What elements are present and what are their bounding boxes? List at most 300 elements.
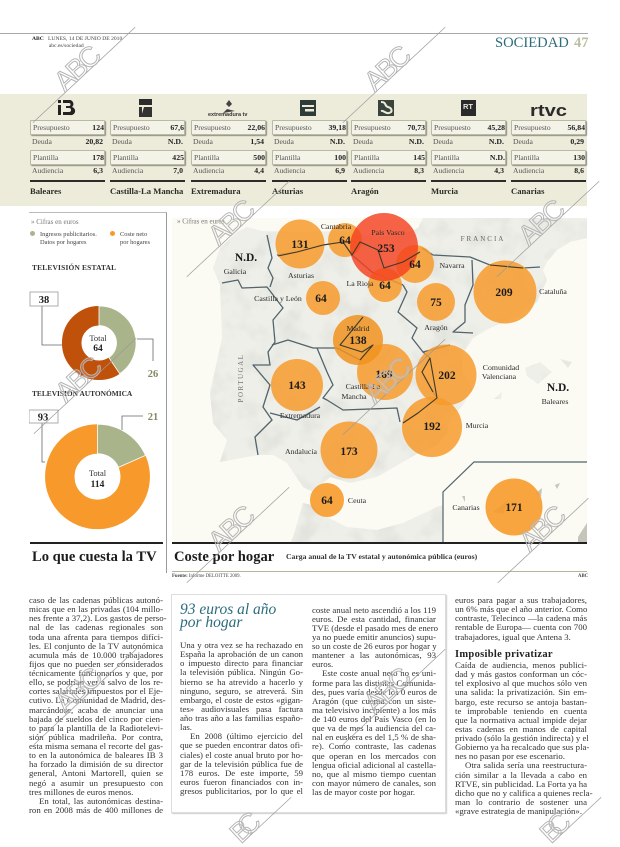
watermarks: ABC: ABC	[512, 193, 571, 251]
row: Plantilla	[30, 150, 105, 165]
sidebar text column 1: tes» audiovisuales pasa factura	[180, 704, 303, 714]
sidebar text column 1: las.	[180, 722, 192, 732]
text column 1: to para la plantilla de la Radiotelevi-	[29, 723, 163, 733]
sidebar text column 2: las de mayor coste por hogar.	[312, 787, 415, 797]
text column 4 top: rentable de Europa— cuenta con 700	[455, 622, 587, 632]
donut chart: state television: 38	[39, 295, 49, 306]
row: Deuda: 0,29	[570, 137, 584, 146]
text column 4 bottom: que la normativa actual impide dejar	[455, 715, 587, 725]
row: Audiencia	[274, 166, 345, 175]
text column 1: cortes salariales impuestos por el Eje-	[29, 686, 163, 696]
sidebar text column 1: En 2008 (último ejercicio del	[190, 731, 303, 741]
source note: Fuente: Informe DELOITTE 2009.	[172, 574, 241, 579]
map values and labels: 253	[377, 243, 395, 255]
row: Deuda: N.D.	[330, 137, 345, 146]
logo: Aragón TV	[378, 100, 394, 116]
row: Plantilla: Plantilla	[354, 153, 379, 162]
row: Deuda	[112, 137, 183, 146]
row: Presupuesto: 39,18	[328, 123, 346, 132]
row: Presupuesto: 70,73	[407, 123, 425, 132]
sidebar text column 1: embargo, el coste de estos «gigan-	[180, 695, 303, 705]
regional borders	[222, 235, 540, 455]
text column 4 bottom: Gobierno ya ha recalcado que sus pla-	[455, 742, 589, 752]
text column 1: fijos que no pueden ser considerados	[29, 659, 163, 669]
text column 4 bottom: man lo contrario de sostener una	[455, 797, 587, 807]
sidebar text column 2: coste anual neto ascendió a los 119	[312, 604, 436, 614]
text column 1: micas que en las privadas (104 millo-	[29, 604, 163, 614]
text column 1: ha forzado la dimisión de su director	[29, 759, 163, 769]
row: Audiencia: 6,9	[335, 166, 345, 175]
sidebar text column 1	[180, 640, 303, 796]
row: Deuda	[32, 137, 103, 146]
sidebar text column 1: que se pueden encontrar datos ofi-	[180, 740, 303, 750]
map values and labels: Comunidad	[483, 363, 519, 372]
logo: Canal Extremadura	[208, 100, 248, 117]
map background	[172, 218, 587, 543]
column: Castilla-La Mancha	[110, 99, 186, 196]
map values and labels: 64	[339, 235, 351, 247]
watermarks: ABC: ABC	[48, 39, 107, 97]
region name: Canarias	[511, 186, 544, 196]
map values and labels: 64	[409, 259, 421, 271]
text column 1: cutivo. La Comunidad de Madrid, des-	[29, 695, 166, 705]
watermarks: ABC: ABC	[49, 661, 108, 719]
circle: Cataluña	[474, 260, 536, 324]
map values and labels: 143	[288, 380, 306, 392]
row: Plantilla: 145	[413, 153, 425, 162]
header rule	[0, 33, 588, 34]
watermarks: ABC: ABC	[358, 661, 417, 719]
text column 1: sión pública madrileña. Por contra,	[29, 732, 163, 742]
map values and labels: 192	[423, 421, 441, 433]
note: figures in euros: » Cifras en euros	[31, 218, 79, 226]
circle: Cantabria	[328, 223, 362, 257]
donut chart: regional television: Total	[89, 468, 107, 478]
text column 1: bajada de sueldos del cinco por cien-	[29, 714, 163, 724]
text column 4 bottom: Caída de audiencia, menos publici-	[455, 660, 587, 670]
sidebar text column 2: lengua oficial adicional al castella-	[312, 760, 436, 770]
row: Presupuesto: Presupuesto	[434, 123, 471, 132]
row: Plantilla	[191, 150, 266, 165]
text column 4 top: trabajadores, igual que Antena 3.	[455, 632, 571, 642]
row: Presupuesto: 124	[92, 123, 104, 132]
text column 4 bottom: RTVE, sin publicidad. La Forta ya ha	[455, 779, 587, 789]
logo: RTM	[461, 100, 476, 116]
text column 4 bottom: dad y más gastos conforman un cóc-	[455, 669, 587, 679]
map values and labels	[177, 218, 569, 514]
row: Plantilla: Plantilla	[33, 153, 58, 162]
row: Audiencia	[112, 166, 183, 175]
watermarks: ABC: ABC	[49, 350, 108, 408]
text column 1: tres millones de euros menos.	[29, 787, 133, 797]
row: Plantilla	[110, 150, 185, 165]
map values and labels: Canarias	[452, 503, 480, 512]
text column 1: ron en 2008 más de 400 millones de	[29, 805, 163, 815]
row: Plantilla: Plantilla	[194, 153, 219, 162]
row: Deuda	[433, 137, 504, 146]
sidebar text column 2	[312, 604, 438, 797]
map values and labels: PORTUGAL	[237, 354, 245, 402]
map values and labels: 171	[505, 502, 523, 514]
circle: La Rioja	[368, 268, 402, 302]
panel: donut charts	[29, 212, 167, 573]
map values and labels: FRANCIA	[461, 235, 505, 243]
map values and labels: Aragón	[424, 323, 448, 332]
text column 1: nes frente a 37,2). Los gastos de perso-	[29, 613, 167, 623]
text column 4 bottom	[455, 660, 593, 816]
map values and labels: Galicia	[224, 267, 247, 276]
donut chart: regional television	[29, 410, 158, 530]
donut chart: regional television: 93	[38, 412, 48, 424]
row: Presupuesto: Presupuesto	[33, 123, 70, 132]
row: Deuda: Deuda	[513, 137, 533, 146]
header date and section url	[32, 36, 122, 48]
text column 4 bottom: nes no pasan por ese escenario.	[455, 751, 565, 761]
row: Plantilla: Plantilla	[434, 153, 459, 162]
sidebar text column 1: ciales) el coste anual bruto por ho-	[180, 750, 303, 760]
row: Deuda: N.D.	[489, 137, 504, 146]
row: Deuda: N.D.	[409, 137, 424, 146]
sidebar text column 2: ya no puede emitir anuncios) supu-	[312, 632, 436, 642]
circle: Castilla-La Mancha	[357, 344, 413, 400]
row: Deuda	[193, 137, 264, 146]
sidebar text column 2: euros. De esta cantidad, financiar	[312, 614, 436, 624]
text column 1: ello, se podrían ver a salvo de los re-	[29, 677, 163, 687]
sidebar text column 2: Aragón (que cuenta con un siste-	[312, 696, 436, 706]
text column 4 bottom: privado (sólo la gestión indirecta) y el	[455, 733, 589, 743]
donut chart: state television	[30, 292, 158, 380]
map values and labels: Mancha	[341, 392, 367, 401]
row: Audiencia: Audiencia	[274, 166, 305, 175]
map values and labels: Murcia	[466, 421, 489, 430]
row: Deuda: Deuda	[193, 137, 213, 146]
row: Deuda: 20,82	[85, 137, 103, 146]
map values and labels: País Vasco	[371, 228, 405, 237]
region name: Baleares	[30, 186, 61, 196]
column: Murcia	[431, 100, 508, 196]
row: Deuda	[353, 137, 424, 146]
circle: Castilla y León	[306, 281, 340, 315]
row: Audiencia: 6,3	[93, 166, 103, 175]
row: Presupuesto: Presupuesto	[354, 123, 391, 132]
heading: Coste por hogar: Coste por hogar	[174, 549, 274, 565]
sidebar text column 1: o impuesto directo para financiar	[180, 658, 303, 668]
sidebar title	[179, 601, 276, 630]
watermarks: ABC: ABC	[202, 193, 261, 251]
row: Presupuesto	[431, 120, 506, 135]
donut chart: state television: 64	[93, 344, 103, 354]
row: Audiencia: Audiencia	[513, 166, 544, 175]
row: Deuda: Deuda	[32, 137, 52, 146]
logo: RTM: RT	[463, 102, 473, 111]
logo: TPA	[300, 100, 316, 116]
row: Plantilla: 130	[573, 153, 585, 162]
map values and labels: Valenciana	[482, 372, 517, 381]
map values and labels: Asturias	[288, 271, 314, 280]
row: Presupuesto: 67,6	[170, 123, 184, 132]
map values and labels: 64	[379, 280, 391, 292]
sidebar text column 1: la televisión pública. Ningún Go-	[180, 667, 303, 677]
heading: regional television: TELEVISIÓN AUTONÓMICA	[32, 389, 132, 398]
row: Audiencia	[433, 166, 504, 175]
legend: net cost: Coste neto	[120, 231, 147, 238]
circle: Madrid	[333, 315, 383, 365]
row: Audiencia	[353, 166, 424, 175]
sidebar text column 1: año tras año a las familias españo-	[180, 713, 303, 723]
map values and labels: Andalucía	[285, 447, 318, 456]
map values and labels: Cantabria	[321, 222, 352, 231]
subtitle: annual charge: Carga anual de la TV estatal y autonómica pública (euros)	[286, 552, 477, 561]
circle: Andalucía	[320, 422, 378, 478]
sidebar text column 2: mantener a las autonómicas, 93	[312, 650, 436, 660]
legend: advertising revenue	[30, 231, 97, 246]
sidebar text column 2: ma televisivo incipiente) a los más	[312, 705, 436, 715]
section title: SOCIEDAD	[495, 35, 569, 51]
column: Extremadura	[191, 100, 268, 196]
legend: net cost: por hogares	[120, 239, 150, 246]
text column 1: to en la autonómica de baleares IB 3	[29, 750, 163, 760]
map values and labels: Madrid	[347, 324, 370, 333]
map values and labels: 131	[291, 239, 309, 251]
map values and labels: 169	[375, 369, 393, 381]
row: Plantilla: Plantilla	[113, 153, 138, 162]
row: Audiencia: Audiencia	[433, 166, 464, 175]
circle: Asturias	[276, 220, 324, 268]
sidebar text column 1: gar de la televisión pública fue de	[180, 759, 303, 769]
map values and labels: Castilla-La	[346, 382, 381, 391]
legend: advertising revenue: Datos por hogares	[40, 239, 86, 246]
text column 1: técnicamente funcionarios y que, por	[29, 668, 163, 678]
map values and labels: Navarra	[439, 261, 465, 270]
row: Audiencia: Audiencia	[353, 166, 384, 175]
row: Plantilla: 500	[253, 153, 265, 162]
text column 1: acumula más de 10.000 trabajadores	[29, 650, 163, 660]
map values and labels: N.D.	[547, 382, 569, 394]
circle: Ceuta	[310, 483, 344, 517]
row: Audiencia	[193, 166, 264, 175]
column: Baleares	[30, 100, 106, 196]
text column 4 bottom: bargo, este recurso se antoja bastan-	[455, 696, 587, 706]
map values and labels: Baleares	[542, 397, 568, 406]
logo: CMT	[139, 99, 152, 117]
text column 4 bottom: tel explosivo al que muchos sólo ven	[455, 678, 587, 688]
map values and labels: Cataluña	[539, 287, 567, 296]
text column 1	[29, 595, 167, 815]
circle: Murcia	[402, 397, 462, 457]
text column 4 bottom: una salida: la privatización. Sin em-	[455, 687, 587, 697]
land masses	[172, 218, 587, 543]
row: Audiencia: Audiencia	[112, 166, 143, 175]
sidebar text column 2: TVE (desde el pasado mes de enero	[312, 623, 438, 633]
row: Plantilla: Plantilla	[275, 153, 300, 162]
text column 1: negó a asumir un presupuesto con	[29, 778, 163, 788]
row: Plantilla: N.D.	[490, 153, 505, 162]
row: Deuda: Deuda	[274, 137, 294, 146]
row: Presupuesto: 56,84	[567, 123, 585, 132]
row: Presupuesto	[272, 120, 347, 135]
sidebar title: por hogar	[180, 614, 242, 630]
logo: IB3	[58, 100, 76, 116]
text column 4 bottom: «grave estrategia de manipulación».	[455, 806, 582, 816]
sidebar text column 2: so un coste de 26 euros por hogar y	[312, 641, 437, 651]
sidebar title: 93 euros al año	[180, 601, 276, 618]
text column 4 bottom: estas cadenas en manos de capital	[455, 724, 587, 734]
row: Presupuesto: 22,06	[247, 123, 265, 132]
row: Deuda	[274, 137, 345, 146]
map values and labels: 75	[430, 297, 442, 309]
donut chart: regional television: 114	[91, 480, 105, 490]
map values and labels: 64	[321, 495, 333, 507]
text column 1: general, Antoni Martorell, quien se	[29, 768, 163, 778]
sidebar text column 2: que operan en los mercados con	[312, 750, 436, 760]
column: Aragón	[351, 100, 428, 196]
sidebar text column 1: 178 euros. De este importe, 59	[180, 768, 303, 778]
watermarks: ABC: ABC	[358, 351, 417, 409]
watermarks: ABC: ABC	[358, 39, 417, 97]
row: Audiencia: 8,3	[414, 166, 424, 175]
row: Presupuesto: 45,28	[487, 123, 505, 132]
row: Deuda: Deuda	[353, 137, 373, 146]
sidebar text column 2: no, que al mismo tiempo cuentan	[312, 769, 436, 779]
column: Asturias	[272, 100, 348, 196]
region name: Asturias	[272, 186, 303, 196]
row: Plantilla	[511, 150, 586, 165]
sidebar text column 1: España la aprobación de un canon	[180, 649, 303, 659]
row: Plantilla	[431, 150, 506, 165]
row: Deuda: Deuda	[433, 137, 453, 146]
rule: map footer	[172, 542, 587, 544]
map values and labels: 202	[438, 370, 456, 382]
text column 4 bottom: dicho que no y califica a quienes recla-	[455, 788, 593, 798]
subheading: Imposible privatizar: Imposible privatizar	[455, 649, 553, 660]
row: Presupuesto: Presupuesto	[113, 123, 150, 132]
header date and section url: ABC LUNES, 14 DE JUNIO DE 2010	[32, 36, 122, 42]
map values and labels: 138	[349, 335, 367, 347]
text column 1: toda una afrenta para tiempos difíci-	[29, 632, 163, 642]
region name: Aragón	[351, 186, 379, 196]
inset: Canary Islands frame	[443, 462, 587, 543]
row: Presupuesto	[351, 120, 426, 135]
map values and labels: N.D.	[235, 252, 257, 264]
row: Presupuesto: Presupuesto	[194, 123, 231, 132]
row: Deuda: N.D.	[168, 137, 183, 146]
row: Presupuesto: Presupuesto	[514, 123, 551, 132]
text column 1: nal de las cadenas regionales son	[29, 622, 163, 632]
text column 4 top	[455, 595, 588, 642]
circle: Extremadura	[271, 359, 323, 411]
circle: Canarias	[486, 478, 542, 536]
credit: ABC	[578, 574, 588, 579]
row: Audiencia: Audiencia	[32, 166, 63, 175]
sidebar text column 1: ninguno, seguro, se atreverá. Sin	[180, 686, 303, 696]
panel: sidebar box	[171, 594, 446, 813]
row: Presupuesto: Presupuesto	[275, 123, 312, 132]
legend: net cost	[110, 231, 150, 246]
sidebar text column 2: des, pues varía desde los 0 euros de	[312, 687, 437, 697]
donut chart: state television: Total	[89, 333, 107, 343]
text column 1: caso de las cadenas públicas autonó-	[29, 595, 163, 605]
sidebar text column 2: Este coste anual neto no es uni-	[322, 668, 436, 678]
map values and labels: 173	[340, 446, 358, 458]
text column 4 top: contraste, Telecinco —la cadena más	[455, 613, 587, 623]
circle: País Vasco	[350, 213, 418, 281]
map values and labels: La Rioja	[346, 279, 374, 288]
sidebar text column 2: re). Como contraste, las cadenas	[312, 741, 436, 751]
row: Presupuesto	[110, 120, 185, 135]
row: Audiencia: 7,0	[173, 166, 183, 175]
circle: Comunidad Valenciana	[416, 344, 476, 406]
watermarks: ABC: ABC	[202, 499, 261, 557]
row: Audiencia: Audiencia	[193, 166, 224, 175]
row: Audiencia: 8,6	[574, 166, 584, 175]
legend: advertising revenue: Ingresos publicitarios.	[40, 231, 97, 238]
row: Deuda	[513, 137, 584, 146]
text column 4 bottom: te improbable teniendo en cuenta	[455, 706, 587, 716]
map values and labels: Ceuta	[348, 496, 367, 505]
heading: state television: TELEVISIÓN ESTATAL	[32, 263, 116, 272]
sidebar text column 2: euros.	[312, 659, 333, 669]
row: Audiencia	[513, 166, 584, 175]
row: Plantilla: 100	[334, 153, 346, 162]
row: Plantilla: Plantilla	[514, 153, 539, 162]
column: Canarias	[511, 101, 588, 196]
map: cost per household	[172, 213, 587, 542]
row: Presupuesto	[191, 120, 266, 135]
map values and labels: 64	[315, 293, 327, 305]
text column 1: les. El conjunto de la TV autonómica	[29, 641, 163, 651]
region name: Extremadura	[191, 186, 240, 196]
text column 4 bottom: ción similar a la llevada a cabo en	[455, 770, 587, 780]
watermarks: ABC: ABC	[513, 499, 572, 557]
heading: Lo que cuesta la TV: Lo que cuesta la TV	[32, 549, 157, 565]
map values and labels: 209	[495, 287, 513, 299]
region borders over circles	[278, 242, 523, 423]
panel: channel data band	[0, 94, 587, 206]
region name: Castilla-La Mancha	[110, 186, 183, 196]
row: Plantilla: 425	[172, 153, 184, 162]
donut chart: regional television: 21	[148, 412, 158, 423]
map values and labels: » Cifras en euros	[177, 218, 225, 226]
sidebar text column 2: con mayor número de canales, son	[312, 778, 436, 788]
sidebar text column 2: que va de mes la audiencia del ca-	[312, 723, 436, 733]
row: Presupuesto	[30, 120, 105, 135]
map values and labels: Castilla y León	[254, 294, 302, 303]
rule: donut panel footer	[30, 542, 163, 544]
sidebar text column 1: euros fueron financiados con in-	[180, 777, 303, 787]
sidebar text column 2: de 140 euros del País Vasco (en lo	[312, 714, 436, 724]
circle: Aragón	[417, 283, 455, 321]
region name: Murcia	[431, 186, 458, 196]
row: Plantilla	[272, 150, 347, 165]
row: Deuda: Deuda	[112, 137, 132, 146]
circle: Navarra	[396, 245, 434, 283]
text column 1: esta misma semana el recorte del gas-	[29, 741, 163, 751]
text column 1: marcándose, acaba de anunciar una	[29, 704, 163, 714]
text column 4 bottom: Otra salida sería una reestructura-	[465, 760, 587, 770]
page number: 47	[574, 35, 589, 51]
row: Presupuesto	[511, 120, 586, 135]
rule: source line	[172, 571, 587, 572]
row: Plantilla: 178	[92, 153, 104, 162]
row: Audiencia: 4,4	[254, 166, 264, 175]
text column 4 top: euros para pagar a sus trabajadores,	[455, 595, 587, 605]
text column 1: En total, las autonómicas destina-	[39, 796, 163, 806]
header date and section url: abc.es/sociedad	[49, 42, 84, 48]
row: Deuda: 1,54	[250, 137, 264, 146]
map values and labels: Extremadura	[280, 411, 321, 420]
sidebar text column 1: Una y otra vez se ha rechazado en	[180, 640, 303, 650]
row: Plantilla	[351, 150, 426, 165]
